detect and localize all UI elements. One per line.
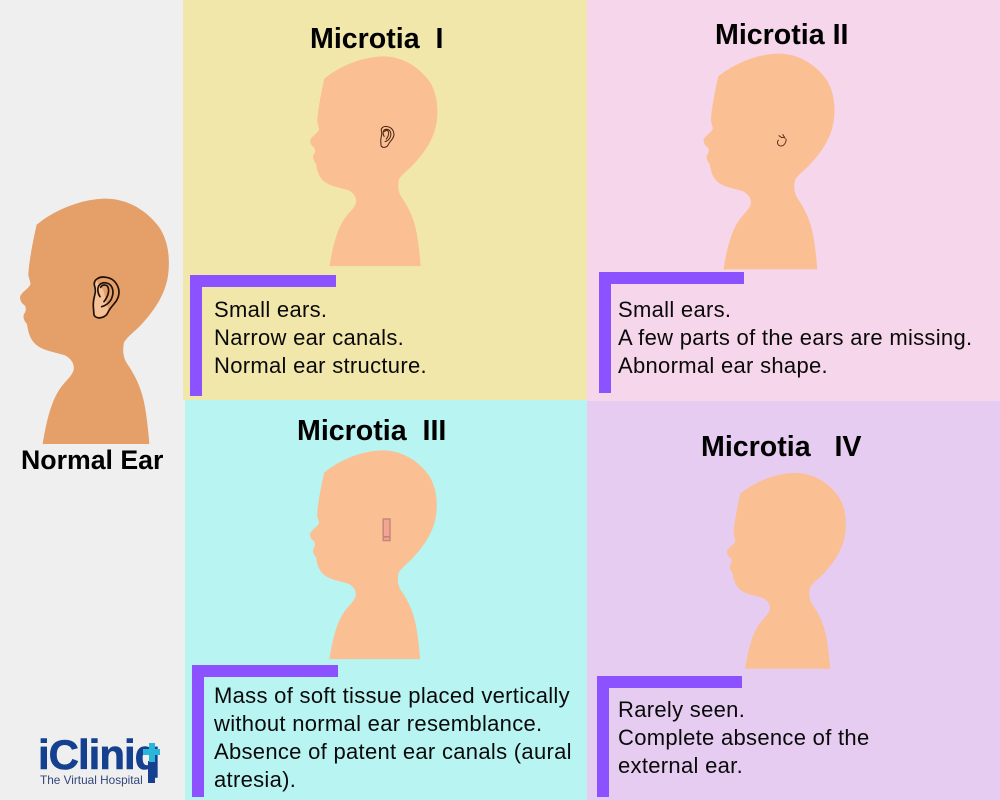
head: Microtia II	[704, 54, 834, 269]
heading: Microtia II: Microtia II	[715, 19, 848, 51]
heading: Microtia I: Microtia I	[310, 23, 443, 55]
bracket: Microtia III	[192, 665, 338, 797]
heading: Normal Ear: Normal Ear	[21, 445, 163, 475]
text block: Microtia II: Small ears. A few parts of the ears are missing. Abnormal ear shape.	[618, 297, 972, 378]
bracket: Microtia I	[190, 275, 336, 396]
bracket: Microtia II	[599, 272, 744, 393]
panel: Microtia II background	[587, 0, 1000, 401]
heading: Microtia III: Microtia III	[297, 415, 446, 447]
head: Microtia IV	[727, 473, 846, 669]
icon: vertical soft tissue mass	[383, 519, 390, 541]
panel: Microtia I background	[183, 0, 587, 400]
heading: Microtia IV: Microtia IV	[701, 431, 861, 463]
panel: Microtia III background	[185, 400, 587, 800]
head: Microtia III	[310, 450, 437, 659]
icon: malformed ear remnant	[778, 135, 786, 146]
text block: Microtia I: Small ears. Narrow ear canals. Normal ear structure.	[214, 297, 427, 378]
head: normal ear	[20, 199, 169, 444]
panel: Microtia IV background	[587, 401, 1000, 800]
head: Microtia I	[310, 56, 437, 266]
text block: Microtia IV: Rarely seen. Complete absence of the external ear.	[618, 697, 870, 778]
logo: iCliniq: iCliniq	[38, 731, 159, 778]
logo: iCliniq: The Virtual Hospital	[40, 773, 143, 787]
text block: Microtia III: Mass of soft tissue placed vertically without normal ear resemblance. Absence of patent ear canals (aural atresia).	[214, 683, 572, 792]
bracket: Microtia IV	[597, 676, 742, 797]
